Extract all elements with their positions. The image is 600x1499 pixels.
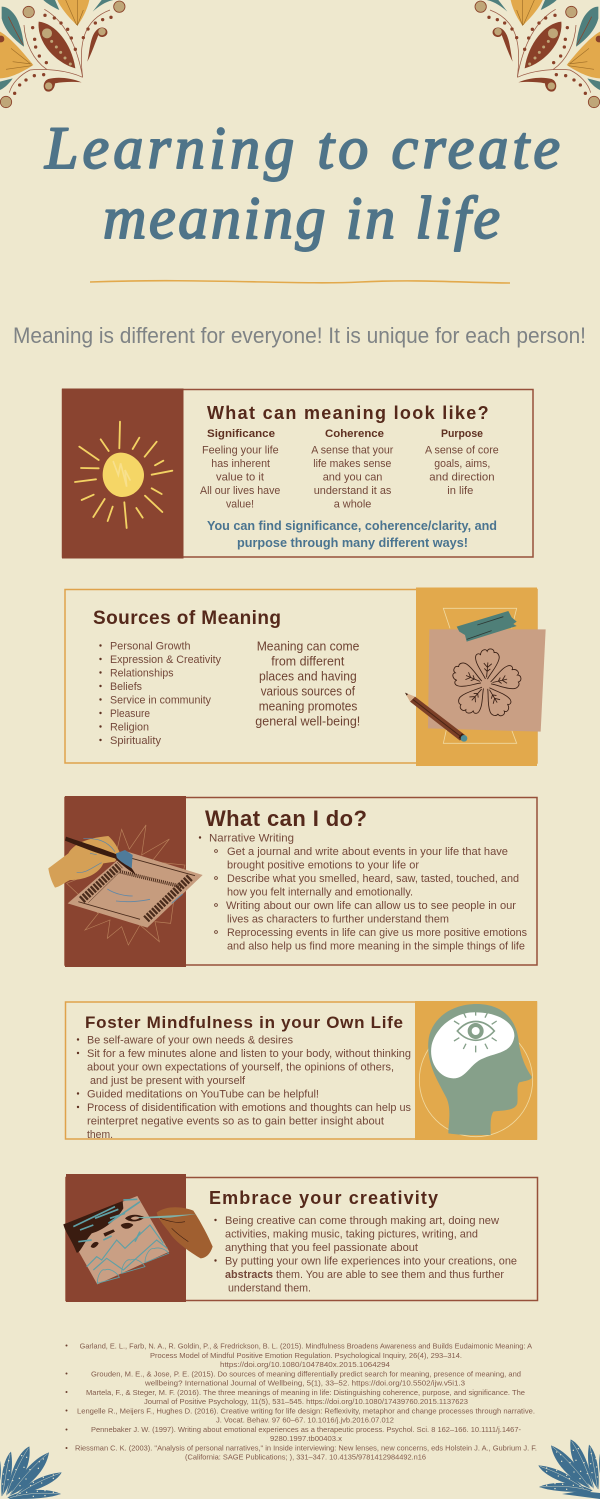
list: sources: Service in community xyxy=(110,694,211,706)
references: Garland, E. L., Farb, N. A., R. Goldin, P., & Fredrickson, B. L. (2015). Mindfulness Broadens Awareness and Builds Eudaimonic Meaning: A xyxy=(80,1342,532,1350)
title underline xyxy=(90,281,510,283)
column: significance: Feeling your life xyxy=(202,444,279,456)
column: coherence: understand it as xyxy=(314,485,392,497)
list: creativity notes: abstracts them. You are able to see them and thus further xyxy=(225,1269,504,1281)
title: meaning in life xyxy=(103,185,500,251)
column: coherence: and you can xyxy=(323,472,382,484)
list: creativity notes: understand them. xyxy=(228,1282,311,1294)
list: mindfulness tips: reinterpret negative events so as to gain better insight about xyxy=(87,1116,384,1128)
icon: hand writing on paper xyxy=(48,825,203,945)
text block: meaning can come xyxy=(255,640,360,728)
text block: meaning can come: meaning promotes xyxy=(259,700,357,714)
column: purpose xyxy=(425,428,499,497)
panel: sources of meaning xyxy=(65,588,546,766)
column: coherence: A sense that your xyxy=(311,444,394,456)
title xyxy=(44,115,560,251)
references: Journal of Positive Psychology, 11(5), 531–545. https://doi.org/10.1080/17439760.2015.1137623 xyxy=(144,1397,468,1406)
column: significance: All our lives have xyxy=(200,485,280,497)
list: mindfulness tips: Sit for a few minutes alone and listen to your body, without thinking xyxy=(87,1048,411,1060)
list: mindfulness tips xyxy=(77,1034,411,1141)
icon: bottom left leaves xyxy=(0,1446,62,1499)
list: mindfulness tips: Guided meditations on YouTube can be helpful! xyxy=(87,1088,319,1100)
column: significance: value to it xyxy=(216,472,264,484)
icon: head with eye xyxy=(419,1004,533,1137)
references: Grouden, M. E., & Jose, P. E. (2015). Do sources of meaning differentially predict search for meaning, presence of meaning, and xyxy=(91,1369,521,1378)
panel: what can I do xyxy=(48,796,537,967)
list: sources: Religion xyxy=(110,722,149,734)
column: purpose: A sense of core xyxy=(425,444,499,456)
list: narrative writing: Narrative Writing xyxy=(209,832,294,844)
icon: bottom right leaves xyxy=(538,1439,600,1499)
list: creativity notes xyxy=(214,1215,517,1294)
text block: meaning can come: Meaning can come xyxy=(257,640,359,654)
icon: sun xyxy=(75,422,172,528)
list: narrative writing: how you felt internally and emotionally. xyxy=(227,886,413,898)
list: narrative writing: Describe what you smelled, heard, saw, tasted, touched, and xyxy=(227,873,519,885)
list: sources: Personal Growth xyxy=(110,640,190,652)
references: Riessman C. K. (2003). "Analysis of personal narratives," in Inside interviewing: New lenses, new concerns, eds Holstein J. A., Gubrium J. F. xyxy=(75,1443,537,1452)
title: Learning to create xyxy=(44,115,560,181)
heading: Foster Mindfulness in your Own Life xyxy=(85,1013,403,1032)
list: narrative writing: Writing about our own life can allow us to see people in our xyxy=(226,900,516,912)
heading: Embrace your creativity xyxy=(209,1188,438,1208)
list: sources xyxy=(99,640,221,747)
column: coherence: life makes sense xyxy=(313,458,391,470)
column: purpose: Purpose xyxy=(441,428,483,440)
list: narrative writing: lives as characters to further understand them xyxy=(227,914,449,926)
panel: what can meaning look like xyxy=(62,388,533,558)
references xyxy=(66,1342,537,1462)
column: purpose: goals, aims, xyxy=(434,458,490,470)
list: mindfulness tips: and just be present with yourself xyxy=(90,1075,246,1087)
column: purpose: and direction xyxy=(429,472,495,484)
references: (California: SAGE Publications; ), 331–347. 10.4135/9781412984492.n16 xyxy=(185,1452,426,1462)
column: significance: Significance xyxy=(207,428,275,440)
list: sources: Relationships xyxy=(110,668,174,680)
text block: meaning can come: various sources of xyxy=(261,684,355,698)
column: coherence: Coherence xyxy=(325,428,384,440)
column: coherence xyxy=(311,428,394,510)
list: narrative writing: brought positive emotions to your life or xyxy=(227,860,419,872)
callout: purpose through many different ways! xyxy=(237,536,468,550)
icon: paper with flower, tape and pencil xyxy=(405,608,546,743)
list: sources: Pleasure xyxy=(110,708,150,720)
panel: foster mindfulness xyxy=(66,1001,537,1141)
ornament: top right corner xyxy=(475,0,600,108)
references: wellbeing? International Journal of Wellbeing, 5(1), 33–52. https://doi.org/10.5502/ijw.v5i1.3 xyxy=(144,1378,465,1388)
list: mindfulness tips: Process of disidentification with emotions and thoughts can help us xyxy=(87,1102,411,1114)
callout: You can find significance, coherence/clarity, and xyxy=(207,519,497,533)
references: https://doi.org/10.1080/1047840x.2015.1064294 xyxy=(220,1360,390,1369)
list: creativity notes: By putting your own life experiences into your creations, one xyxy=(225,1256,517,1268)
references: Pennebaker J. W. (1997). Writing about emotional experiences as a therapeutic process. Psychol. Sci. 8 162–166. 10.1111/j.1467- xyxy=(91,1425,522,1434)
icon: hand painting on paper xyxy=(63,1196,213,1284)
list: sources: Beliefs xyxy=(110,681,142,693)
text block: meaning can come: general well-being! xyxy=(255,714,360,728)
heading: What can meaning look like? xyxy=(207,403,489,423)
references: Process Model of Mindful Positive Emotion Regulation. Psychological Inquiry, 26(4), 293–314. xyxy=(150,1351,462,1360)
column: significance: value! xyxy=(226,498,254,510)
list: sources: Expression & Creativity xyxy=(110,654,221,666)
list: narrative writing: and also help us find more meaning in the simple things of life xyxy=(227,940,525,952)
heading: What can I do? xyxy=(205,806,367,831)
column: coherence: a whole xyxy=(334,498,371,510)
list: narrative writing xyxy=(199,832,527,952)
column: purpose: in life xyxy=(447,485,473,497)
list: sources: Spirituality xyxy=(110,735,161,747)
list: mindfulness tips: them. xyxy=(87,1129,113,1141)
list: narrative writing: Reprocessing events in life can give us more positive emotions xyxy=(227,927,527,939)
list: creativity notes: Being creative can come through making art, doing new xyxy=(225,1215,499,1227)
list: mindfulness tips: about your own expectations of yourself, the opinions of others, xyxy=(87,1062,394,1074)
references: Lengelle R., Meijers F., Hughes D. (2016). Creative writing for life design: Reflexivity, metaphor and change processes through narrative. xyxy=(77,1406,535,1415)
list: narrative writing: Get a journal and write about events in your life that have xyxy=(227,846,508,858)
list: creativity notes: anything that you feel passionate about xyxy=(225,1242,418,1254)
list: mindfulness tips: Be self-aware of your own needs & desires xyxy=(87,1034,293,1046)
references: J. Vocat. Behav. 97 60–67. 10.1016/j.jvb.2016.07.012 xyxy=(216,1416,394,1424)
ornament: top left corner xyxy=(0,0,125,108)
references: 9280.1997.tb00403.x xyxy=(270,1434,342,1443)
text block: meaning can come: places and having xyxy=(259,670,357,684)
subtitle: Meaning is different for everyone! It is unique for each person! xyxy=(13,323,586,348)
list: creativity notes: activities, making music, taking pictures, writing, and xyxy=(225,1228,478,1240)
column: significance: has inherent xyxy=(211,458,270,470)
references: Martela, F., & Steger, M. F. (2016). The three meanings of meaning in life: Distinguishing coherence, purpose, and significance. The xyxy=(86,1388,525,1397)
heading: Sources of Meaning xyxy=(93,608,281,629)
panel: embrace your creativity xyxy=(63,1174,537,1302)
callout xyxy=(207,519,497,550)
text block: meaning can come: from different xyxy=(271,654,345,668)
column: significance xyxy=(200,428,280,510)
